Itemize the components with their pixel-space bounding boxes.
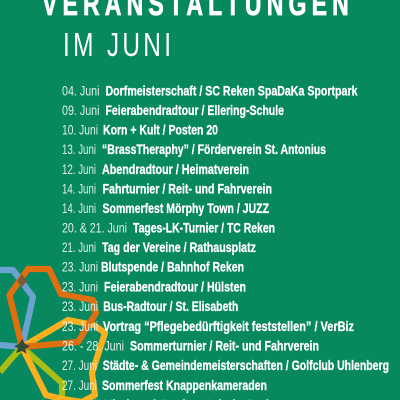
- event row 11: [62, 279, 246, 295]
- event row 3: [62, 122, 218, 138]
- logo petal: orange: [10, 269, 96, 347]
- event row 10: 23. Juni: [62, 260, 98, 276]
- event row 3: 10. Juni: [62, 122, 98, 138]
- logo crossing overlap: [17, 274, 27, 287]
- event row 12: Bus-Radtour / St. Elisabeth: [103, 299, 238, 315]
- event row 15: 27. Juni: [62, 358, 97, 374]
- event row 10: Blutspende / Bahnhof Reken: [101, 260, 244, 276]
- logo centre: [14, 339, 30, 354]
- event row 12: [62, 299, 238, 315]
- event row 5: 12. Juni: [62, 162, 96, 178]
- event row 16: Sommerfest Knappenkameraden: [102, 378, 267, 394]
- event row 6: Fahrturnier / Reit- und Fahrverein: [102, 182, 272, 198]
- logo petal: yellow: [22, 320, 105, 400]
- event row 4: 13. Juni: [62, 142, 96, 158]
- event row 7: Sommerfest Mörphy Town / JUZZ: [102, 201, 269, 217]
- event row 8: Tages-LK-Turnier / TC Reken: [133, 220, 275, 236]
- event row 7: [62, 201, 269, 217]
- event row 12: 23. Juni: [62, 299, 98, 315]
- event list: [62, 84, 389, 400]
- event row 4: [62, 142, 326, 158]
- event row 6: 14. Juni: [62, 182, 96, 198]
- event row 9: 21. Juni: [62, 240, 96, 256]
- event row 10: [62, 260, 244, 276]
- event row 2: [62, 103, 284, 119]
- event row 14: 26. - 28. Juni: [62, 338, 124, 354]
- event row 17: [62, 398, 269, 400]
- event row 11: 23. Juni: [62, 279, 98, 295]
- event row 8: [62, 220, 275, 236]
- logo petal: blue: [0, 270, 33, 347]
- event row 7: 14. Juni: [62, 201, 96, 217]
- event row 16: [62, 378, 267, 394]
- event row 8: 20. & 21. Juni: [62, 220, 127, 236]
- event row 2: 09. Juni: [62, 103, 100, 119]
- event row 3: Korn + Kult / Posten 20: [103, 122, 218, 138]
- event row 13: 23. Juni: [62, 319, 98, 335]
- event row 2: Feierabendradtour / Ellering-Schule: [106, 103, 284, 119]
- event row 1: 04. Juni: [62, 84, 100, 100]
- event row 9: Tag der Vereine / Rathausplatz: [102, 240, 256, 256]
- event row 9: [62, 240, 256, 256]
- event row 14: Sommerturnier / Reit- und Fahrverein: [130, 338, 319, 354]
- event row 4: “BrassTheraphy” / Förderverein St. Antonius: [102, 142, 326, 158]
- event row 6: [62, 182, 272, 198]
- logo petal: olive: [0, 347, 62, 400]
- subtitle: im Juni: IM JUNI: [63, 28, 171, 64]
- event row 16: 27. Juni: [62, 378, 97, 394]
- icon: flower logo: [0, 269, 105, 400]
- event row 5: Abendradtour / Heimatverein: [102, 162, 249, 178]
- event row 5: [62, 162, 249, 178]
- event row 14: [62, 338, 319, 354]
- event row 11: Feierabendradtour / Hülsten: [104, 279, 246, 295]
